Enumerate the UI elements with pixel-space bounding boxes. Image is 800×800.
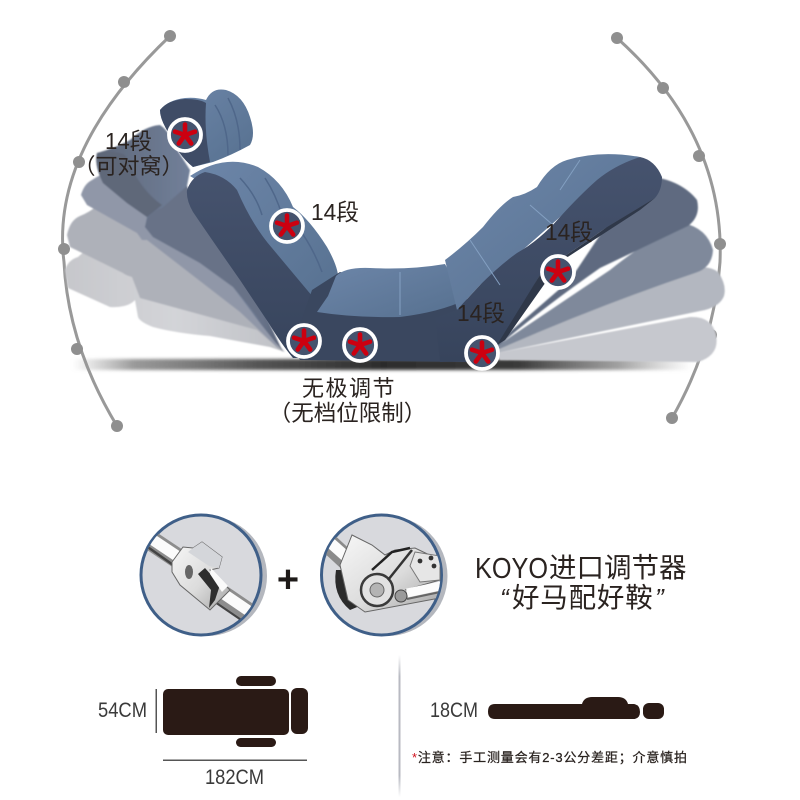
adjustment markers: red asterisks xyxy=(169,119,574,369)
label: leg rest 14 steps: 14段 xyxy=(545,219,593,245)
label: headrest 14 steps: 14段 xyxy=(105,128,152,154)
label: stepless adjustment: 无极调节 xyxy=(302,376,396,401)
chair: seat and leg rest xyxy=(293,154,662,362)
chair xyxy=(160,89,662,362)
label: stepless adjustment: （无档位限制） xyxy=(269,401,426,426)
ghost positions: left backrest xyxy=(65,125,285,352)
side view silhouette with height xyxy=(430,697,664,722)
heading: KOYO imported adjuster: 进口调节器 xyxy=(549,552,686,583)
heading: KOYO imported adjuster xyxy=(475,552,686,613)
floor shadow xyxy=(72,359,692,370)
mechanism photo 1 xyxy=(138,515,267,636)
label: stepless adjustment xyxy=(269,376,426,426)
top view silhouette with dimensions xyxy=(98,676,308,789)
chair: headrest xyxy=(160,89,253,167)
label: footrest 14 steps: 14段 xyxy=(457,300,505,326)
infographic canvas xyxy=(58,30,726,794)
label: headrest 14 steps xyxy=(73,128,184,179)
dimension: width: 54CM xyxy=(98,699,147,722)
arc: right adjustment range xyxy=(611,32,726,424)
label: headrest 14 steps: （可对窝） xyxy=(73,154,184,179)
plus sign: + xyxy=(277,559,299,601)
heading: KOYO imported adjuster: ” xyxy=(655,583,665,613)
dimension: height: 18CM xyxy=(430,699,478,722)
arc: left adjustment range xyxy=(58,30,176,432)
dimension: length: 182CM xyxy=(205,766,264,789)
mechanism photo 2 xyxy=(322,515,448,636)
heading: KOYO imported adjuster: “ xyxy=(500,583,510,613)
heading: KOYO imported adjuster: KOYO xyxy=(475,553,548,585)
label: backrest 14 steps: 14段 xyxy=(311,199,359,225)
chair: backrest xyxy=(187,162,340,358)
heading: KOYO imported adjuster: 好马配好鞍 xyxy=(512,582,654,613)
ghost positions: right leg rest xyxy=(495,175,725,362)
vertical divider xyxy=(398,655,400,797)
footnote: measurement tolerance: *注意：手工测量会有2-3公分差距；介意慎拍 xyxy=(412,750,687,766)
